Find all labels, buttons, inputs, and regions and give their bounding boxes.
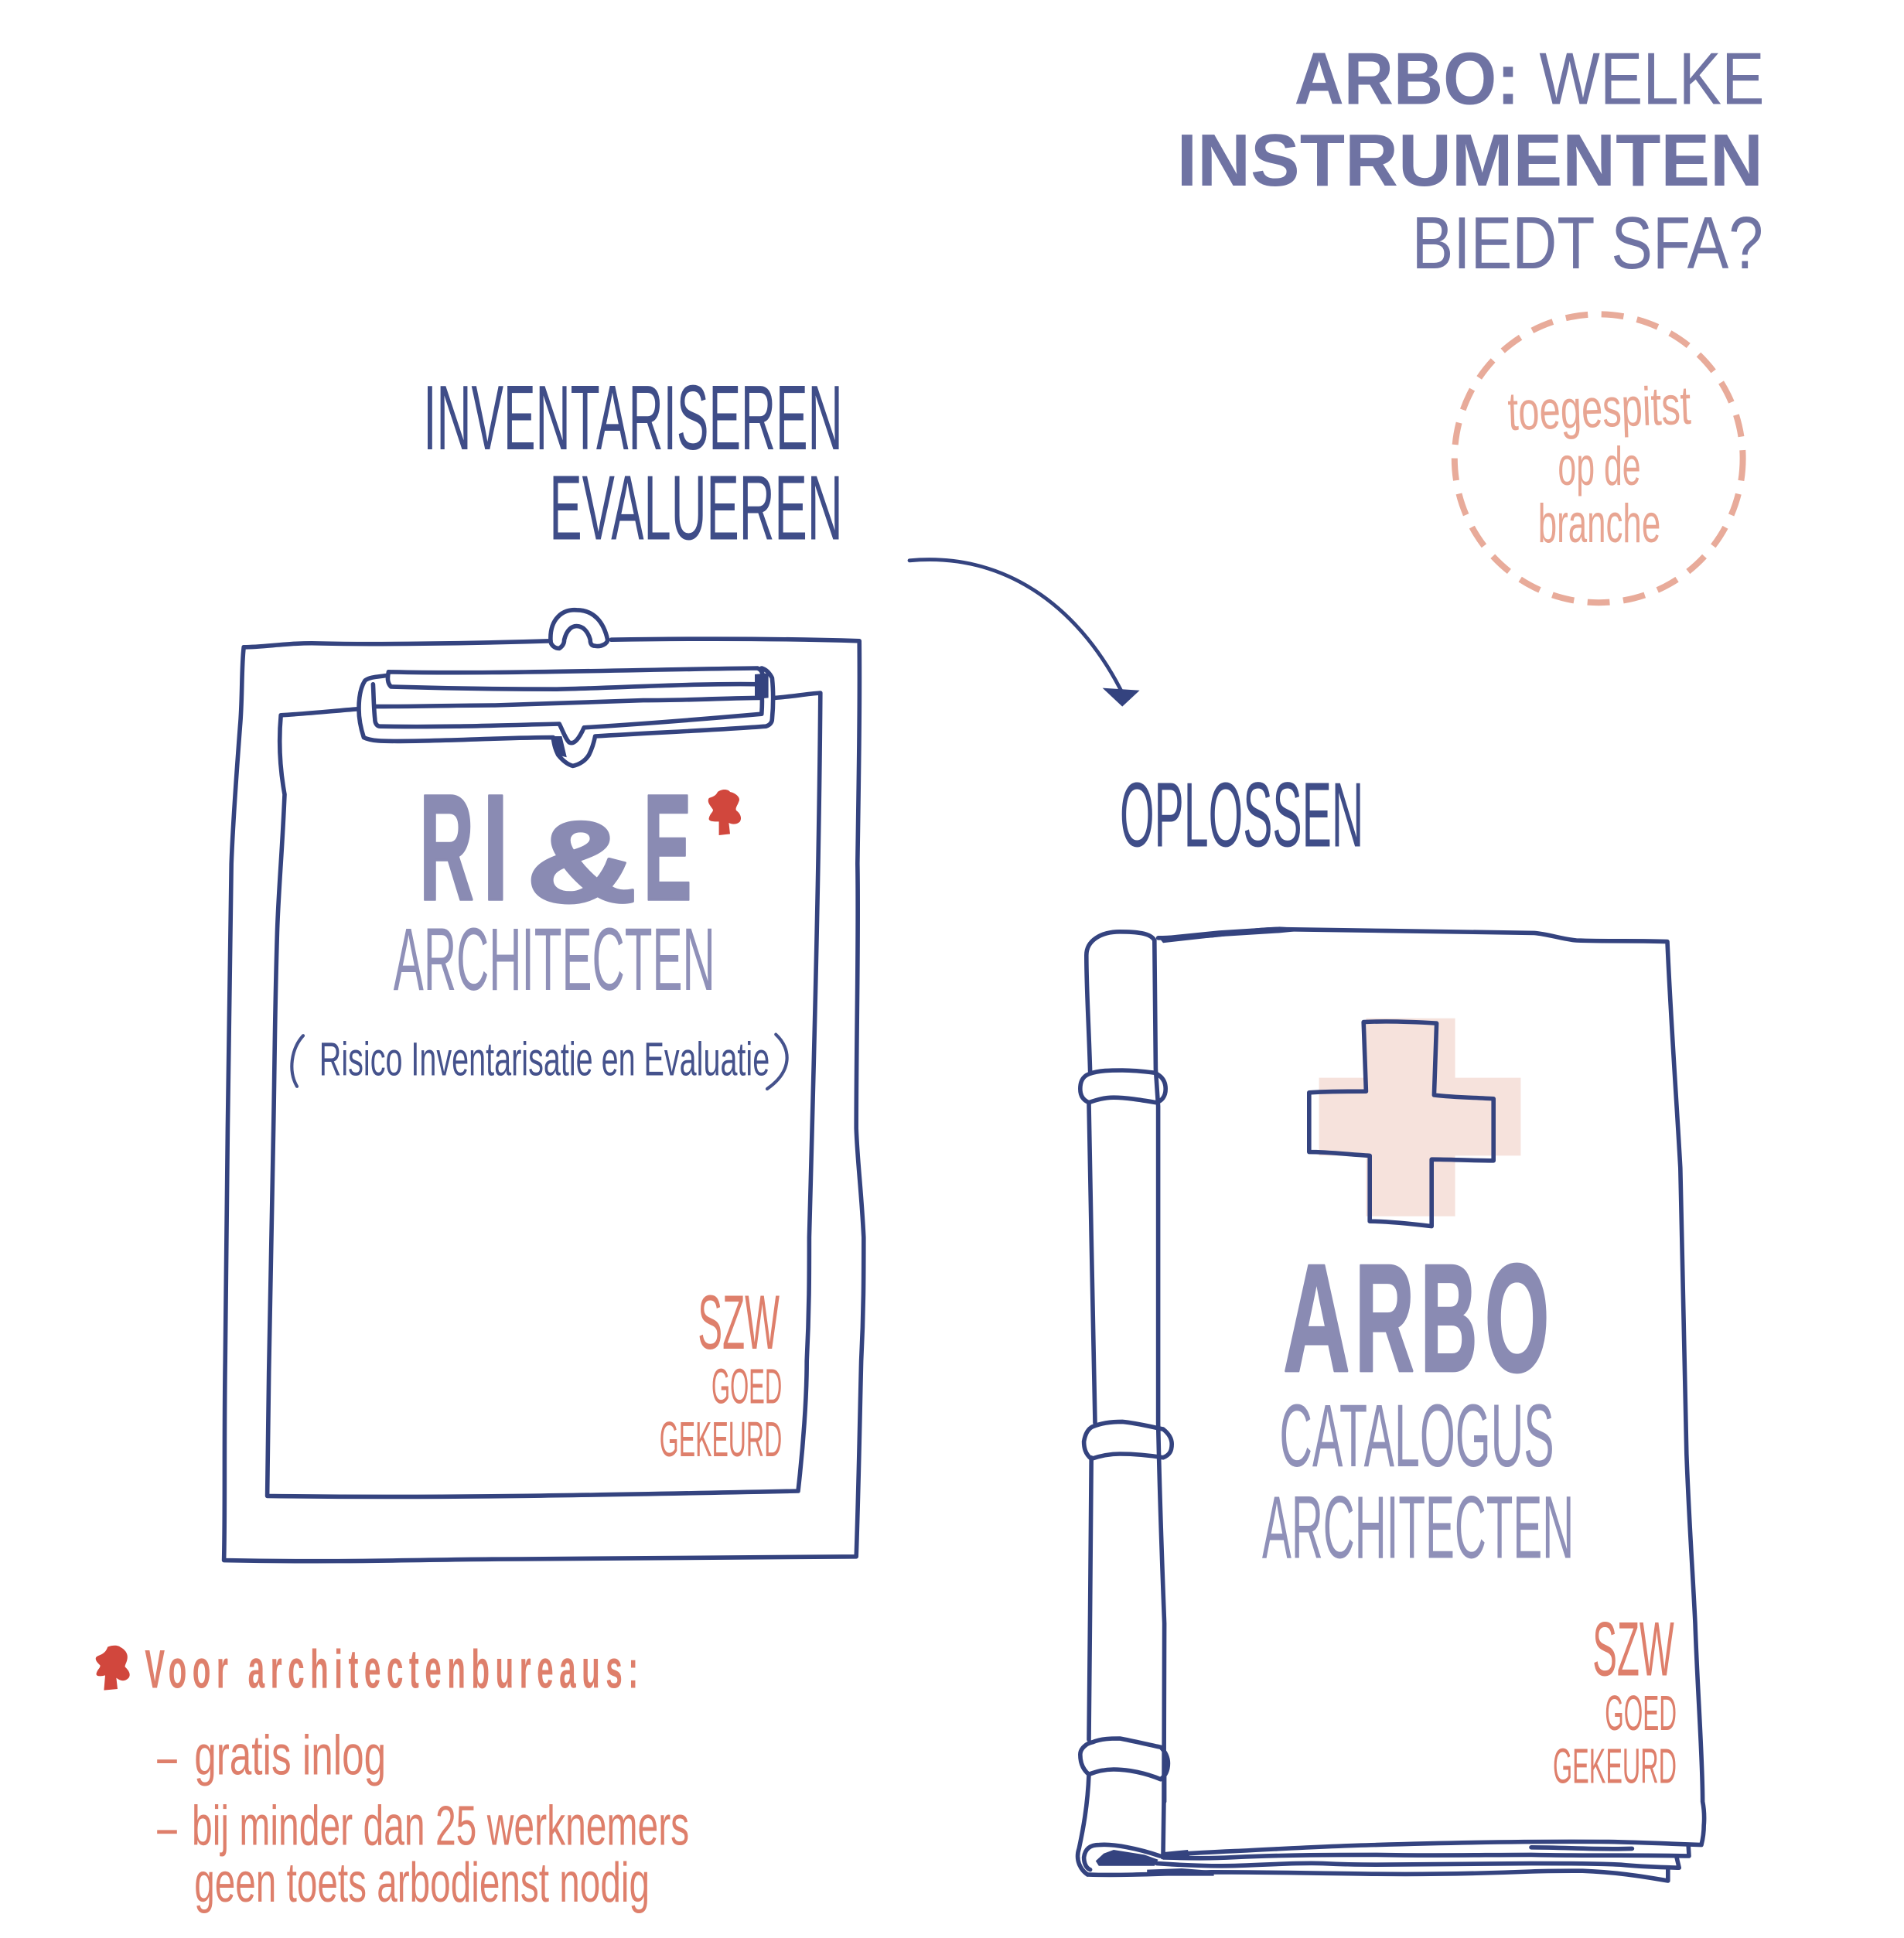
parenthesised explanation: Risico Inventarisatie en Evaluatie bbox=[319, 1032, 769, 1085]
title: WELKE bbox=[1539, 37, 1765, 120]
subtitle: catalogus architecten bbox=[1262, 1387, 1574, 1577]
RI&E title: R bbox=[419, 763, 474, 932]
book illustration bbox=[1078, 926, 1704, 1881]
icon: red asterisk bbox=[96, 1646, 130, 1691]
book illustration: GOED bbox=[1605, 1685, 1677, 1741]
footnote list: geen toets arbodienst nodig bbox=[194, 1852, 650, 1914]
subtitle: architecten: ARCHITECTEN bbox=[394, 910, 715, 1009]
heading: inventariseren evalueren: INVENTARISEREN bbox=[423, 367, 843, 469]
callout: toegespitst op de branche: branche bbox=[1538, 493, 1660, 554]
icon: red asterisk bbox=[708, 790, 741, 835]
footnote list bbox=[157, 1725, 689, 1914]
clipboard illustration: SZW bbox=[698, 1280, 780, 1366]
ARBO title: R bbox=[1355, 1233, 1414, 1404]
footnote list: gratis inlog bbox=[194, 1725, 386, 1786]
parenthesised explanation bbox=[292, 1032, 787, 1089]
heading: inventariseren evalueren bbox=[423, 367, 843, 560]
spine band 2 bbox=[1084, 1421, 1172, 1459]
footnote: voor architectenbureaus bbox=[96, 1639, 689, 1914]
spine band 1 bbox=[1080, 1070, 1165, 1103]
book pages bbox=[1084, 1844, 1689, 1881]
RI&E title: I bbox=[483, 763, 509, 932]
ARBO title: B bbox=[1421, 1233, 1477, 1404]
book illustration: SZW bbox=[1592, 1606, 1674, 1692]
clipboard paper bbox=[268, 693, 821, 1496]
clipboard board bbox=[224, 639, 864, 1561]
approval label: GEKEURD bbox=[660, 1411, 782, 1467]
ARBO title: O bbox=[1485, 1233, 1549, 1404]
footnote list: bij minder dan 25 werknemers bbox=[192, 1796, 689, 1858]
approval label bbox=[660, 1280, 782, 1467]
RI&E title: & bbox=[526, 797, 637, 926]
title: BIEDT SFA? bbox=[1412, 202, 1763, 285]
title: INSTRUMENTEN bbox=[1177, 119, 1763, 202]
ARBO title: A bbox=[1283, 1233, 1350, 1404]
subtitle: catalogus architecten: CATALOGUS bbox=[1279, 1387, 1554, 1486]
clipboard illustration bbox=[224, 610, 864, 1561]
clipboard clip bbox=[359, 668, 773, 766]
text: OPLOSSEN bbox=[1120, 764, 1363, 866]
callout: toegespitst op de branche bbox=[1455, 314, 1743, 602]
clipboard ring bbox=[551, 610, 608, 648]
approval label bbox=[1553, 1606, 1677, 1794]
callout: toegespitst op de branche: op de bbox=[1558, 435, 1641, 496]
callout: toegespitst op de branche: toegespitst bbox=[1506, 374, 1692, 442]
heading: inventariseren evalueren: EVALUEREN bbox=[549, 458, 843, 560]
icon: medical cross bbox=[1309, 1018, 1520, 1227]
clipboard illustration: GOED bbox=[711, 1358, 782, 1414]
arrow bbox=[909, 560, 1140, 707]
RI&E title bbox=[419, 763, 691, 932]
clipboard illustration: E bbox=[643, 763, 691, 932]
book cover bbox=[1155, 930, 1704, 1854]
spine band 3 bbox=[1080, 1738, 1168, 1779]
title: ARBO: bbox=[1295, 37, 1520, 120]
title bbox=[1177, 37, 1765, 285]
approval label: GEKEURD bbox=[1553, 1738, 1677, 1794]
book illustration: ARCHITECTEN bbox=[1262, 1478, 1574, 1577]
book spine bbox=[1078, 932, 1165, 1875]
ARBO title bbox=[1283, 1233, 1549, 1404]
footnote heading: Voor architectenbureaus: bbox=[145, 1639, 638, 1701]
